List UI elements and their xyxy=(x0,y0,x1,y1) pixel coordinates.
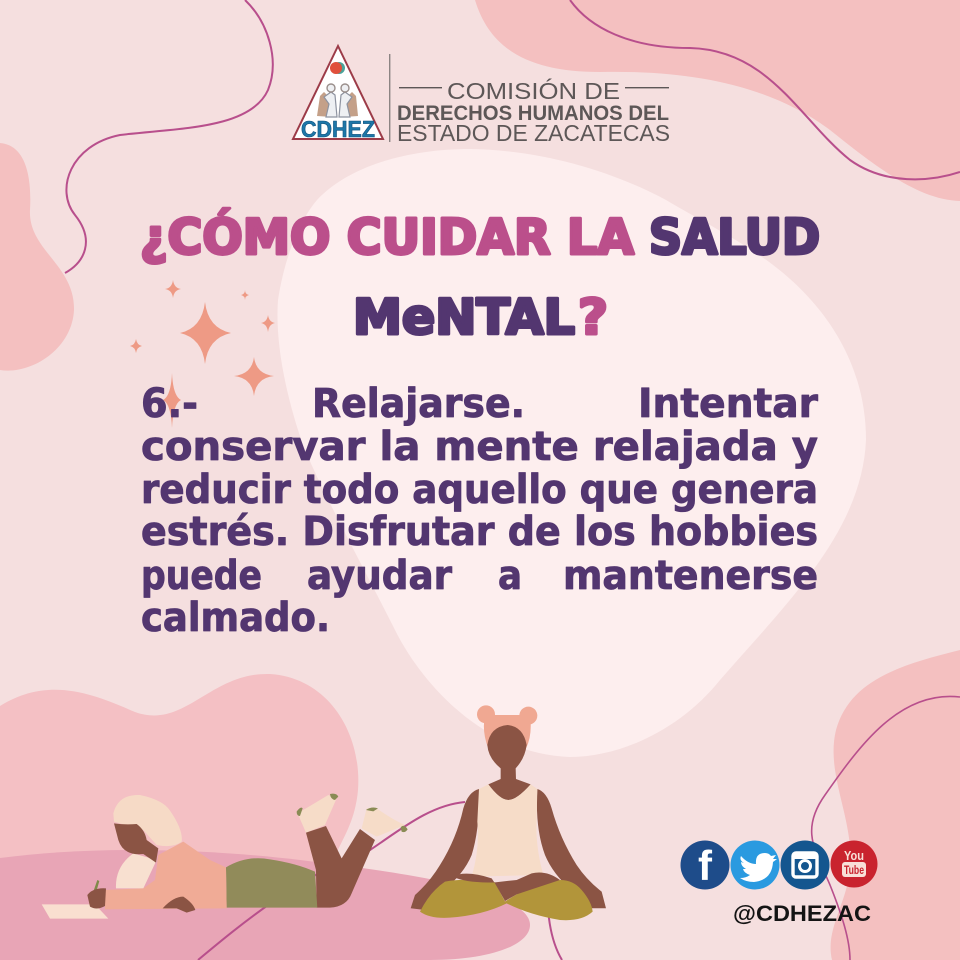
paper xyxy=(42,904,108,919)
crossed legs xyxy=(420,880,593,920)
skirt xyxy=(226,858,317,908)
logo triangle xyxy=(293,46,383,139)
illustration: woman lying down writing xyxy=(42,794,408,919)
body text: Relajarse. xyxy=(312,381,525,427)
hair and buns xyxy=(477,705,537,748)
logo text xyxy=(397,78,670,146)
body text xyxy=(141,381,818,641)
blob: top right xyxy=(475,0,960,201)
icon: facebook xyxy=(680,840,730,890)
curve: top right line xyxy=(570,0,960,179)
icon: youtube: You xyxy=(844,848,864,863)
body text: calmado. xyxy=(141,595,330,641)
logo figures and hands xyxy=(317,84,358,117)
social handle: @CDHEZAC xyxy=(733,901,871,926)
body text: a xyxy=(498,553,522,599)
ellipse: floor xyxy=(0,850,530,960)
icon: youtube xyxy=(830,840,878,888)
title: ? xyxy=(578,289,608,346)
writing hand xyxy=(87,888,106,908)
left arm xyxy=(411,789,479,910)
top xyxy=(105,842,227,909)
body text: mantenerse xyxy=(563,553,818,599)
right arm xyxy=(537,789,606,908)
curve: top left line xyxy=(65,0,273,273)
face xyxy=(114,823,158,863)
illustration: woman meditating xyxy=(411,705,606,920)
logo text: COMISIÓN DE xyxy=(447,78,620,104)
title: ¿CÓMO CUIDAR LA xyxy=(140,207,634,266)
title xyxy=(140,207,820,346)
body text: reducir todo aquello que genera xyxy=(141,467,818,513)
icon: twitter xyxy=(730,840,780,890)
body text: conservar la mente relajada y xyxy=(141,424,818,470)
icon: youtube: Tube xyxy=(844,863,864,877)
curve: bottom center line xyxy=(198,802,562,960)
blob: bottom left xyxy=(0,674,358,900)
logo text: ESTADO DE ZACATECAS xyxy=(397,120,670,146)
blob: center xyxy=(277,149,866,757)
sock toes xyxy=(297,794,408,832)
legs xyxy=(306,826,375,908)
logo sun icon xyxy=(330,62,345,74)
logo wordmark CDHEZ: CDHEZ xyxy=(301,116,375,142)
tank top xyxy=(472,784,543,877)
blob: bottom right xyxy=(831,650,960,960)
logo xyxy=(293,46,670,146)
icon: facebook: f xyxy=(698,842,713,889)
sparkles xyxy=(130,280,275,428)
hair xyxy=(113,795,182,846)
curve: bottom right line xyxy=(812,696,960,960)
feet xyxy=(453,872,560,901)
socks xyxy=(298,795,405,837)
blob: left xyxy=(0,143,74,371)
body text: estrés. Disfrutar de los hobbies xyxy=(141,509,818,555)
body text: puede xyxy=(141,553,262,599)
icon: instagram xyxy=(780,840,830,890)
logo divider xyxy=(389,54,390,142)
body text: Intentar xyxy=(638,381,818,427)
pencil xyxy=(93,880,99,893)
cream arm xyxy=(116,853,157,888)
head and neck xyxy=(487,725,531,800)
social icons xyxy=(680,840,878,926)
body text: 6.- xyxy=(141,381,198,427)
body text: ayudar xyxy=(307,553,452,599)
resting hand xyxy=(163,897,195,913)
logo text: DERECHOS HUMANOS DEL xyxy=(397,102,669,125)
title: MeNTAL xyxy=(353,289,575,346)
title: SALUD xyxy=(649,209,820,266)
